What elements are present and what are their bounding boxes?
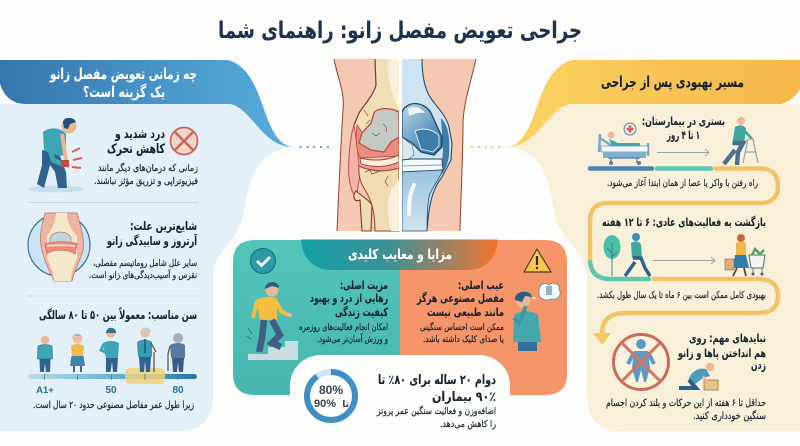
progress track: recovery road [590, 168, 778, 345]
femoral component [402, 104, 442, 155]
heading: left panel: یک گزینه است؟ [83, 83, 165, 101]
panel side: cons [400, 240, 567, 395]
person 2 [70, 334, 85, 372]
outer blue band [441, 118, 449, 175]
icon: hospital bed [599, 123, 648, 165]
panel background: left [0, 104, 293, 431]
text: durability detail: اضافه‌وزن و فعالیت سنگین عمر پروتز [376, 405, 496, 417]
heading: left panel [49, 65, 197, 101]
connector dots: left [299, 146, 329, 148]
panel background: right [507, 104, 800, 431]
title: جراحی تعویض مفصل زانو: راهنمای شما [218, 18, 582, 44]
damaged cartilage [359, 109, 399, 152]
text: step 3 note [606, 398, 766, 422]
heading: suitable age: سن مناسب: معمولاً بین ۵۰ تا ۸۰ سالگی [39, 307, 197, 323]
femur bone [402, 59, 452, 231]
connector dots: right [471, 146, 500, 148]
heading: main advantage [310, 278, 388, 319]
heading: most common cause: شایع‌ترین علت: [130, 219, 197, 233]
panel header bar [301, 240, 498, 270]
fibula [354, 191, 372, 231]
icon: man climbing stairs [247, 282, 298, 360]
text: implant lifetime: زیرا طول عمر مفاصل مصنوعی حدود ۲۰ سال است. [33, 400, 194, 411]
text: durability detail [376, 405, 496, 430]
icon: man with knee pain [28, 118, 84, 192]
tibial plate [402, 159, 443, 172]
person 1 [38, 336, 52, 372]
text: advantage detail: و ورزش آسان‌تر می‌شود. [317, 333, 388, 345]
label: age 1: A1+ [36, 385, 54, 396]
heading: severe pain: درد شدید و [114, 127, 165, 142]
chart: donut 80 to 90 percent: 90% [314, 398, 336, 410]
heading: main advantage: کیفیت زندگی [335, 305, 388, 319]
panel header: right [507, 60, 800, 147]
text: severe pain detail: زمانی که درمان‌های دیگر مانند [98, 162, 198, 174]
icon: kneeling person lifting box [679, 363, 718, 390]
heading: key pros and cons: مزایا و معایب کلیدی [348, 247, 452, 263]
icon: check mark [250, 248, 276, 274]
heading: main disadvantage: عیب اصلی: [458, 278, 504, 292]
synovium strip [349, 125, 360, 198]
text: advantage detail: امکان انجام فعالیت‌های روزمره [299, 323, 388, 333]
heading: left panel: چه زمانی تعویض مفصل زانو [49, 65, 197, 84]
heading: severe pain: کاهش تحرک [107, 142, 165, 157]
panel header: left [0, 60, 293, 147]
implant half [402, 59, 476, 231]
chart: donut 80 to 90 percent [307, 372, 355, 420]
step 1 heading: hospital stay: بستری در بیمارستان: [642, 114, 725, 128]
meniscus [360, 155, 399, 166]
icon: arthritic knee [28, 213, 90, 281]
text: severe pain detail: فیزیوتراپی و تزریق مؤثر نباشند. [94, 176, 198, 187]
heading: main advantage: رهایی از درد و بهبود [310, 291, 388, 306]
heading: most common cause: آرتروز و سابیدگی زانو [106, 233, 198, 249]
step 3 heading: important prohibitions [677, 331, 766, 372]
callout: durability [290, 355, 510, 430]
tibia [359, 166, 399, 231]
femur [354, 59, 399, 168]
text: step 3 note: سنگین خودداری کنید. [693, 410, 766, 422]
text: other causes: نقرس و آسیب‌دیدگی‌های زانو است. [89, 269, 197, 281]
icon: forbidden sign [170, 128, 198, 154]
step 3 heading: important prohibitions: نبایدهای مهم: روی [689, 331, 766, 346]
panel: when is knee replacement an option [0, 60, 293, 431]
arthritic half [334, 59, 399, 231]
heading: most common cause [106, 219, 198, 249]
icon: person shopping [725, 234, 765, 276]
arrow: step 2 [653, 257, 715, 264]
label: age 80: 80 [172, 385, 184, 396]
person 4 [137, 328, 156, 372]
step 3 heading: important prohibitions: زدن [751, 358, 766, 372]
text: other causes: سایر علل شامل روماتیسم مفصلی، [93, 259, 197, 269]
heading: severe pain [107, 127, 165, 157]
icon: person walking by tree [604, 233, 650, 276]
text: step 1 note: راه رفتن با واکر یا عصا از همان ابتدا آغاز می‌شود. [607, 176, 758, 189]
text: severe pain detail [94, 162, 198, 187]
panel: recovery path [507, 60, 800, 431]
heading: twenty-year durability: ۹۰٪ بیماران [432, 390, 496, 405]
person 5 [168, 333, 185, 372]
text: step 3 note: حداقل تا ۶ هفته از این حرکات و بلند کردن اجسام [606, 398, 766, 409]
text: other causes [89, 259, 197, 281]
chart: donut 80 to 90 percent: تا [342, 400, 349, 410]
heading: main disadvantage: مانند طبیعی نیست [427, 305, 504, 319]
text: disadvantage detail [420, 321, 504, 345]
person 3 [101, 328, 119, 372]
chart: age timeline with people [28, 328, 197, 396]
text: disadvantage detail: ممکن است احساس سنگینی [420, 321, 504, 333]
icon: warning triangle [524, 249, 551, 272]
tibial stem [402, 170, 443, 231]
label: age 50: 50 [105, 385, 117, 396]
step 1 heading: hospital stay [642, 114, 725, 143]
heading: twenty-year durability: دوام ۲۰ ساله برای ۸۰٪ تا [378, 373, 496, 388]
heading: main disadvantage [416, 278, 504, 319]
central divider [399, 59, 402, 231]
text: disadvantage detail: یا صدای کلیک داشته باشد. [423, 335, 504, 345]
illustration: knee before and after [334, 59, 476, 231]
chart: donut 80 to 90 percent: 80% [319, 383, 343, 397]
heading: main disadvantage: مفصل مصنوعی هرگز [416, 291, 504, 306]
step 1 heading: hospital stay: ۱ تا ۴ روز [666, 128, 700, 143]
panel side: pros [233, 240, 400, 395]
text: advantage detail [299, 323, 388, 345]
heading: main advantage: مزیت اصلی: [340, 278, 388, 292]
insert [402, 137, 414, 160]
timeline bar [28, 368, 197, 384]
icon: prohibited crossed legs [614, 334, 668, 390]
icon: thinking man [513, 283, 560, 351]
panel: pros and cons [233, 240, 567, 430]
heading: twenty-year durability [378, 373, 496, 405]
arrow: step 1 [657, 149, 709, 156]
inflamed joint tissue [356, 125, 399, 158]
text: step 2 note: بهبودی کامل ممکن است بین ۶ ماه تا یک سال طول بکشد. [597, 290, 766, 301]
icon: person with walker [724, 117, 758, 165]
step 3 heading: important prohibitions: هم انداختن پاها و زانو [677, 346, 766, 361]
text: durability detail: را کاهش می‌دهد. [440, 419, 496, 430]
